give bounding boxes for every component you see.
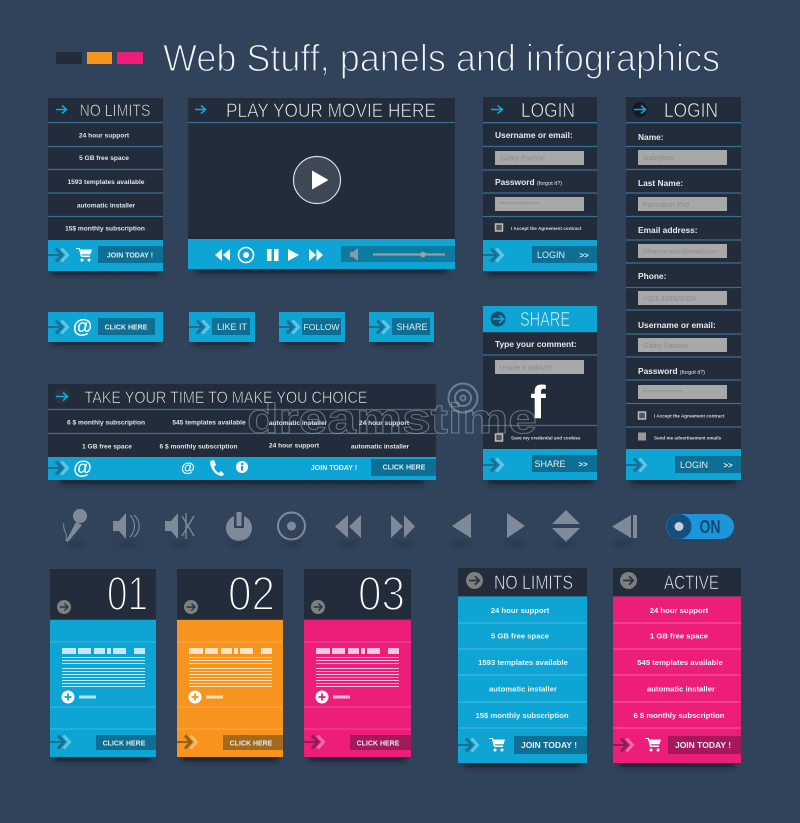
contact icons: @ [181, 459, 195, 475]
panel: take your time: 545 templates available [172, 420, 246, 426]
button: like it [189, 312, 255, 345]
number: 01 [107, 568, 148, 621]
card: 01 [50, 568, 156, 761]
panel: share: >> [578, 460, 588, 469]
pricing panel: active: 545 templates available [637, 658, 723, 667]
heading: login: LOGIN [521, 100, 575, 122]
panel: take your time: automatic installer [269, 420, 328, 427]
panel: login full: LOGIN [680, 460, 708, 470]
panel: no limits pricing: 5 GB free space [79, 155, 129, 162]
panel: login small: LOGIN [537, 250, 565, 260]
contact icons [181, 459, 248, 476]
panel: no limits pricing: automatic installer [77, 202, 136, 210]
pricing panel: active: 6 $ monthly subscription [634, 711, 725, 720]
icon: previous [612, 515, 637, 538]
heading: ACTIVE [664, 573, 719, 594]
panel: take your time [48, 384, 436, 484]
icon: right [507, 513, 525, 538]
icon: header arrow [54, 389, 70, 404]
heading: TAKE YOUR TIME TO MAKE YOU CHOICE [84, 388, 368, 407]
pricing panel: active: automatic installer [647, 684, 715, 694]
button: follow: FOLLOW [304, 322, 339, 332]
icon: plus [62, 690, 74, 704]
panel: take your time: 24 hour support [269, 442, 320, 450]
button: click here: @ [73, 316, 92, 338]
icon: share arrow [490, 312, 506, 326]
icon: microphone [64, 509, 87, 542]
pricing panel: no limits: 15$ monthly subscription [475, 711, 569, 720]
panel: movie player [188, 98, 455, 273]
pricing panel: no limits: JOIN TODAY ! [521, 740, 577, 750]
heading: play your movie: PLAY YOUR MOVIE HERE [226, 101, 436, 122]
icon: power [226, 510, 252, 541]
panel: login small: >> [579, 251, 589, 260]
button: click here: CLICK HERE [105, 324, 148, 332]
icon: rewind [335, 515, 361, 538]
volume control [341, 246, 455, 262]
icon: plus [316, 690, 328, 704]
icon: speaker [113, 513, 139, 539]
panel: login full: I Accept the Agreement contract [654, 414, 725, 418]
panel: take your time: 6 $ monthly subscription [159, 444, 238, 450]
player controls [215, 248, 323, 262]
panel: no limits pricing: 24 hour support [79, 132, 130, 140]
panel: share: SHARE [534, 459, 566, 469]
watermark [247, 384, 537, 442]
pricing panel: active [613, 568, 741, 767]
panel: take your time: CLICK HERE [383, 464, 426, 472]
panel: share: Save my credential and cookies [511, 436, 581, 440]
icon: facebook f: f [530, 376, 546, 428]
pricing panel: no limits: automatic installer [489, 684, 557, 694]
panel: take your time: automatic installer [351, 444, 410, 450]
panel: login full: Password (forgot it?) [638, 366, 705, 376]
panel: login full: Name: [638, 132, 664, 142]
icon: up down [552, 510, 580, 542]
card: 02: CLICK HERE [230, 740, 273, 748]
pricing panel: no limits: 24 hour support [491, 606, 550, 615]
title: Web Stuff, panels and infographics [163, 38, 720, 80]
panel: login small: I Accept the Agreement contract [511, 226, 582, 231]
heading: login: LOGIN [664, 100, 718, 122]
panel: login full: +321 338928329 [643, 296, 696, 303]
panel: share: I made it today!!!! [499, 365, 553, 372]
panel: take your time: 1 GB free space [82, 444, 132, 450]
pricing panel: no limits: 5 GB free space [491, 632, 550, 640]
panel: login full: Send me advertisement emails [654, 436, 722, 440]
button: like it: LIKE IT [217, 322, 248, 332]
watermark: dreamstime [247, 395, 537, 442]
panel: no limits pricing: JOIN TODAY ! [107, 252, 153, 260]
card: 03: CLICK HERE [357, 740, 400, 748]
icon: speaker muted [165, 513, 194, 539]
panel: login full: Gabry Panson [643, 343, 688, 350]
panel: login small: Username or email: [495, 130, 573, 140]
text block [62, 648, 145, 687]
pricing panel: no limits: 1593 templates available [478, 658, 569, 667]
panel: login full [626, 97, 741, 484]
heading: no limits: NO LIMITS [80, 101, 150, 120]
panel: take your time: JOIN TODAY ! [311, 465, 357, 472]
panel: login small: *************** [499, 202, 540, 208]
panel: no limits pricing: 1593 templates available [68, 179, 145, 186]
pricing panel: no limits [458, 568, 587, 767]
button: share [369, 312, 434, 345]
panel: no limits pricing [48, 98, 163, 275]
panel: login full: Username or email: [638, 320, 716, 330]
button: follow [279, 312, 345, 345]
card: 03 [304, 568, 411, 761]
panel: login small: Password (forgot it?) [495, 177, 562, 187]
pricing panel: active: 1 GB free space [650, 632, 709, 640]
icon: target [278, 512, 305, 540]
colour swatches [56, 52, 143, 64]
panel: login full: >> [723, 461, 733, 470]
panel: take your time: 24 hour support [359, 420, 410, 427]
icon: play button [294, 156, 340, 204]
panel: login full: Email address: [638, 225, 698, 235]
panel: login small [483, 97, 597, 275]
icon: left [452, 513, 471, 538]
card: 02 [177, 568, 283, 761]
icon: header arrow [632, 102, 648, 117]
card: 01: CLICK HERE [103, 740, 146, 748]
panel: login full: Last Name: [638, 178, 683, 188]
button: click here [48, 312, 163, 345]
number: 02 [228, 568, 275, 621]
panel: login full: Gabryhon [643, 155, 674, 162]
icon: plus [188, 690, 202, 704]
toggle: on [666, 514, 734, 539]
panel: login full: EPansonasso@email.com [643, 248, 717, 256]
panel: no limits pricing: 15$ monthly subscription [65, 226, 145, 232]
toggle: on: ON [700, 517, 720, 537]
panel: share: Type your comment: [495, 339, 577, 349]
header arrow [56, 106, 66, 114]
panel: login full: Phone: [638, 271, 666, 281]
pricing panel: active: 24 hour support [650, 606, 709, 615]
panel: take your time: @ [73, 458, 92, 479]
panel: login full: *************** [642, 390, 683, 396]
icon: fast forward [391, 515, 415, 538]
heading: NO LIMITS [494, 573, 573, 594]
text block [189, 648, 272, 687]
button: share: SHARE [396, 322, 428, 332]
heading: share: SHARE [520, 309, 570, 331]
panel: take your time: 6 $ monthly subscription [67, 420, 145, 426]
text block [316, 648, 399, 687]
panel: login small: Gabry Panson [500, 156, 545, 162]
icon shadows [68, 543, 631, 545]
number: 03 [358, 568, 405, 621]
panel: share [483, 306, 597, 484]
panel: login full: Pansatron Piro [643, 202, 689, 209]
icon row [64, 509, 734, 545]
pricing panel: active: JOIN TODAY ! [675, 740, 731, 750]
